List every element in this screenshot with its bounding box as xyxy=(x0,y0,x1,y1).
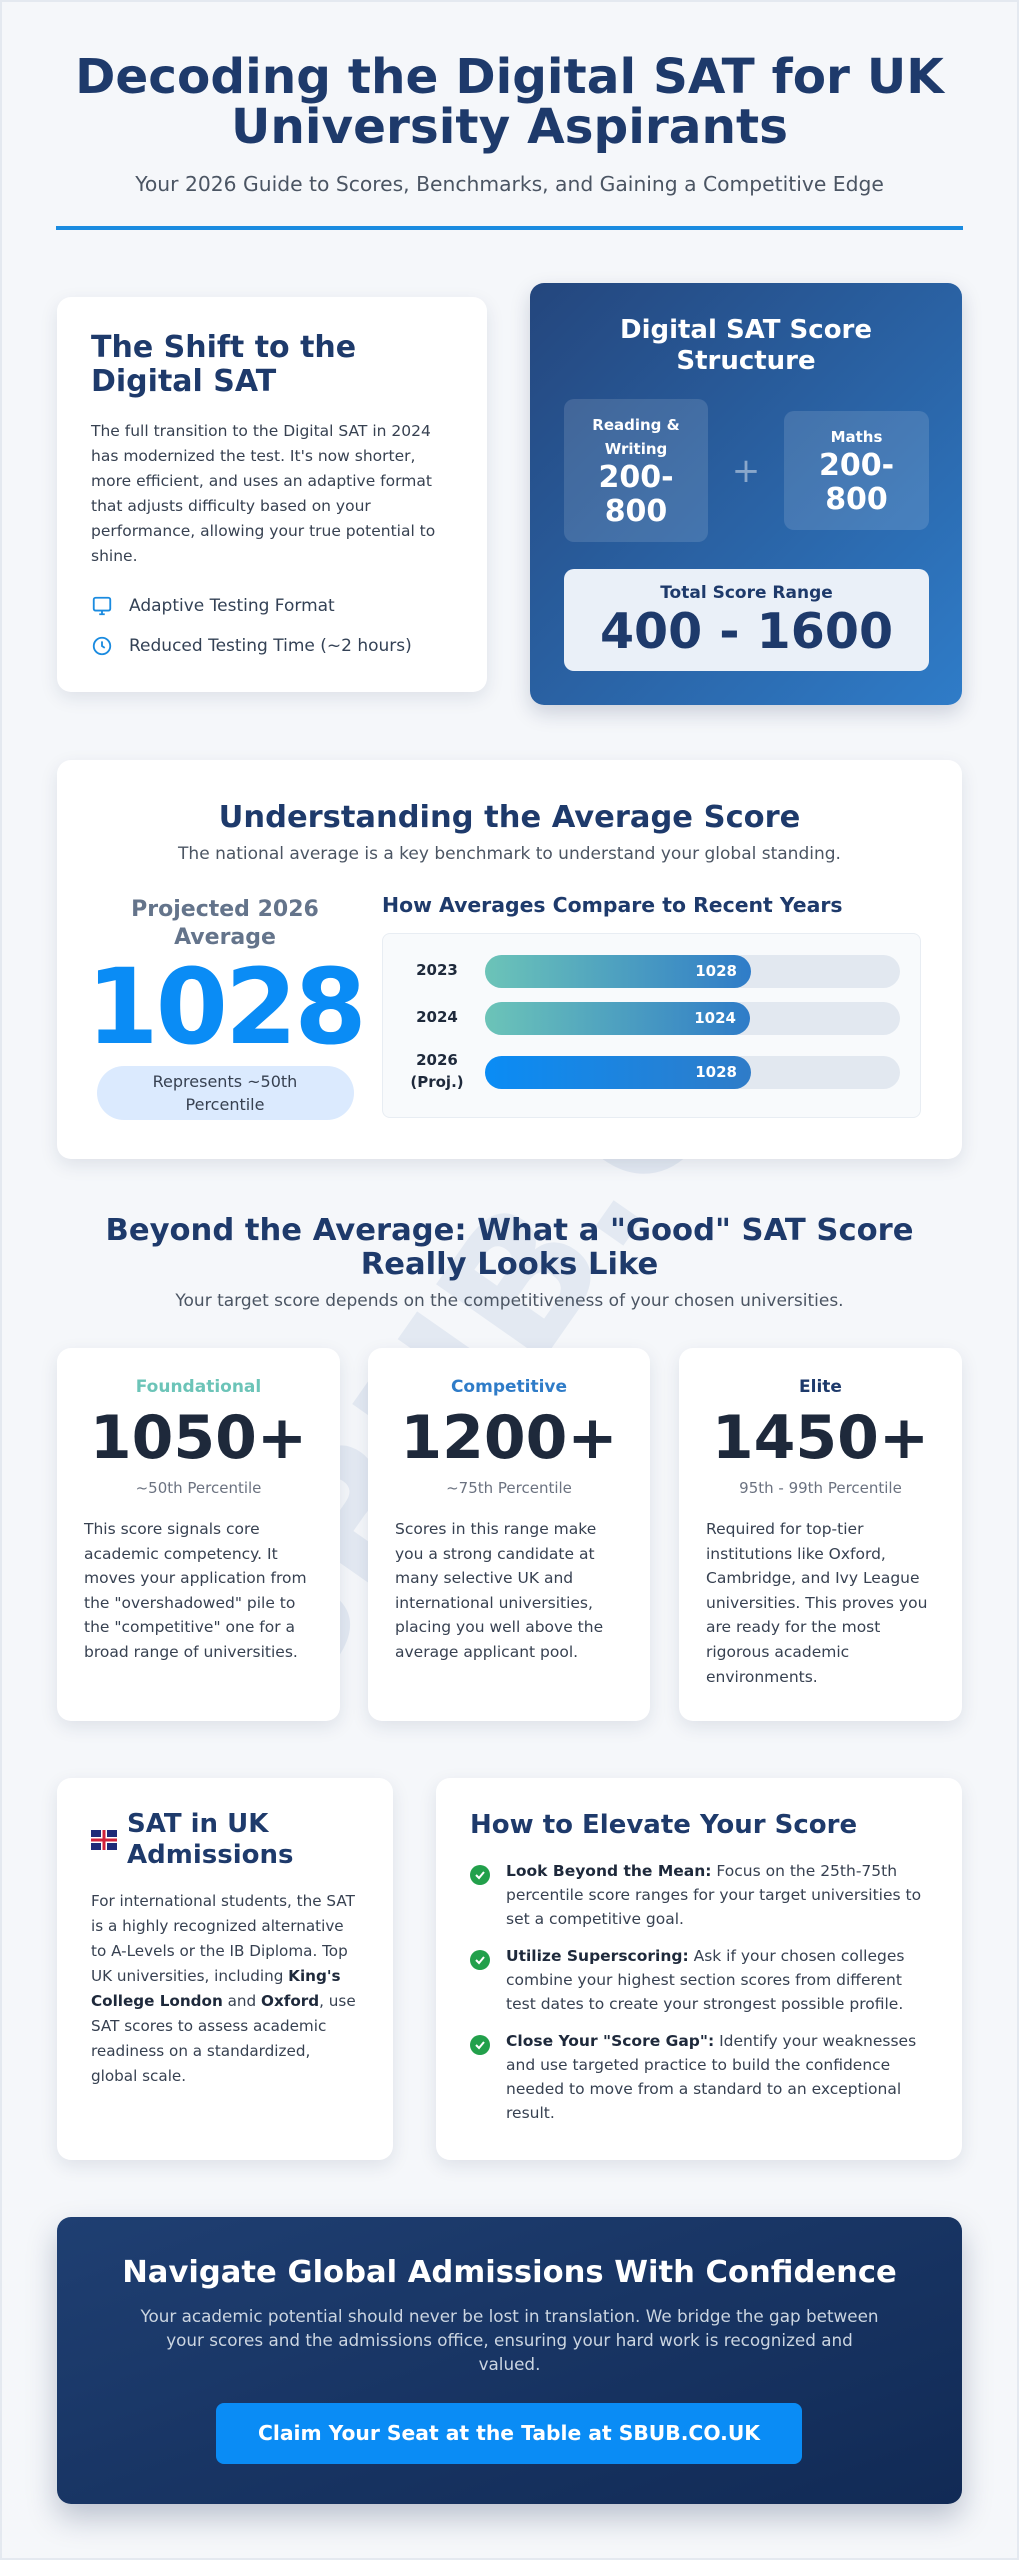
subheading: Your target score depends on the competitiveness of your chosen universities. xyxy=(175,1291,844,1311)
heading xyxy=(91,330,356,399)
big stat: Average xyxy=(174,925,276,950)
big stat xyxy=(86,897,364,1120)
big stat: 1028 xyxy=(86,946,364,1068)
button xyxy=(216,2403,802,2464)
box: maths: 800 xyxy=(825,482,888,517)
heading xyxy=(620,315,872,376)
card: competitive xyxy=(368,1348,650,1721)
bullet list: Close Your "Score Gap": Identify your weaknesses and use targeted practice to build the confidence needed to move from a standard to an exceptional result. xyxy=(506,2032,916,2122)
card: foundational: 1050+ xyxy=(90,1403,307,1473)
bullet list: Look Beyond the Mean: Focus on the 25th-75th percentile score ranges for your target universities to set a competitive goal. xyxy=(506,1862,921,1928)
box: reading & writing xyxy=(564,399,708,542)
total range xyxy=(564,569,929,671)
card: foundational: Foundational xyxy=(136,1377,261,1397)
bar chart: 1028 xyxy=(695,1063,737,1081)
card: elite: Required for top-tier institutions like Oxford, Cambridge, and Ivy League universities. This proves you are ready for the most rigorous academic environments. xyxy=(706,1520,927,1686)
heading: beyond the average xyxy=(106,1213,913,1282)
card: elite: 95th - 99th Percentile xyxy=(739,1479,902,1497)
pill xyxy=(96,1066,354,1120)
bar chart: 1028 xyxy=(695,962,737,980)
heading: Digital SAT Score xyxy=(620,315,872,345)
panel: SAT in UK admissions xyxy=(57,1778,393,2160)
heading with flag icon: Admissions xyxy=(127,1840,293,1870)
title: Decoding the Digital SAT for UK xyxy=(75,49,944,105)
heading with flag icon xyxy=(91,1809,293,1870)
box: reading & writing: Reading & xyxy=(592,416,680,434)
button: Claim Your Seat at the Table at SBUB.CO.UK xyxy=(258,2421,760,2445)
total range: 400 - 1600 xyxy=(600,603,893,660)
title: University Aspirants xyxy=(231,99,788,155)
box: maths: Maths xyxy=(831,428,882,446)
box: maths: 200- xyxy=(819,448,894,483)
bar chart: 2024 xyxy=(416,1008,458,1026)
title xyxy=(75,49,946,155)
heading: The Shift to the xyxy=(91,330,356,365)
heading: Understanding the Average Score xyxy=(219,800,800,835)
card: foundational xyxy=(57,1348,340,1721)
big stat: Projected 2026 xyxy=(131,897,319,922)
panel: average score xyxy=(57,760,962,1159)
bar chart: (Proj.) xyxy=(410,1073,464,1091)
heading: Digital SAT xyxy=(91,364,276,399)
bar chart: 2023 xyxy=(416,961,458,979)
plus: + xyxy=(732,451,760,491)
card: competitive: Scores in this range make you a strong candidate at many selective UK and international universities, placing you well above the average applicant pool. xyxy=(395,1520,603,1661)
text block: For international students, the SAT is a highly recognized alternative to A-Levels or the IB Diploma. Top UK universities, including King's College London and Oxford, use SAT scores to assess academic readiness on a standardized, global scale. xyxy=(91,1892,356,2085)
box: reading & writing: 800 xyxy=(605,494,667,529)
card: competitive: Competitive xyxy=(451,1377,567,1397)
text block: The full transition to the Digital SAT in 2024 has modernized the test. It's now shorter, more efficient, and uses an adaptive format that adjusts difficulty based on your performance, allowing your true potential to shine. xyxy=(91,422,435,565)
heading: beyond the average: Really Looks Like xyxy=(361,1247,658,1282)
bar chart: 1024 xyxy=(694,1009,736,1027)
card: elite: Elite xyxy=(799,1377,842,1397)
heading: beyond the average: Beyond the Average: What a "Good" SAT Score xyxy=(106,1213,913,1248)
card: foundational: ~50th Percentile xyxy=(136,1479,261,1497)
bullet list: Utilize Superscoring: Ask if your chosen colleges combine your highest section scores from different test dates to create your strongest possible profile. xyxy=(506,1947,904,2013)
panel: call to action xyxy=(57,2217,962,2504)
feature: time: Reduced Testing Time (~2 hours) xyxy=(129,636,412,656)
box: reading & writing: Writing xyxy=(605,440,667,458)
pill: Represents ~50th xyxy=(153,1072,297,1091)
bar chart xyxy=(382,933,921,1118)
panel: score structure xyxy=(530,283,962,705)
bar chart: 2026 xyxy=(416,1051,458,1069)
chart heading: How Averages Compare to Recent Years xyxy=(382,893,843,917)
heading: How to Elevate Your Score xyxy=(470,1810,857,1840)
pill: Percentile xyxy=(186,1095,264,1114)
card: foundational: This score signals core academic competency. It moves your application from the "overshadowed" pile to the "competitive" one for a broad range of universities. xyxy=(84,1520,307,1661)
card: competitive: ~75th Percentile xyxy=(446,1479,572,1497)
feature: adaptive: Adaptive Testing Format xyxy=(129,596,335,616)
watermark: SBUB.CO xyxy=(161,876,851,1736)
bullet list xyxy=(470,1862,921,2122)
card: competitive: 1200+ xyxy=(400,1403,618,1473)
text: Your academic potential should never be lost in translation. We bridge the gap between your scores and the admissions office, ensuring your hard work is recognized and valued. xyxy=(140,2306,879,2374)
subtitle: Your 2026 Guide to Scores, Benchmarks, and Gaining a Competitive Edge xyxy=(135,172,884,196)
box: reading & writing: 200- xyxy=(598,460,674,495)
panel: how to elevate xyxy=(436,1778,962,2160)
heading: Navigate Global Admissions With Confidence xyxy=(122,2255,897,2290)
heading with flag icon: SAT in UK xyxy=(127,1809,268,1839)
card: elite xyxy=(679,1348,962,1721)
total range: Total Score Range xyxy=(660,583,833,603)
subheading: The national average is a key benchmark to understand your global standing. xyxy=(178,844,841,864)
card: elite: 1450+ xyxy=(712,1403,929,1473)
heading: Structure xyxy=(676,346,816,376)
panel: shift to digital SAT xyxy=(57,297,487,692)
box: maths xyxy=(784,411,929,530)
